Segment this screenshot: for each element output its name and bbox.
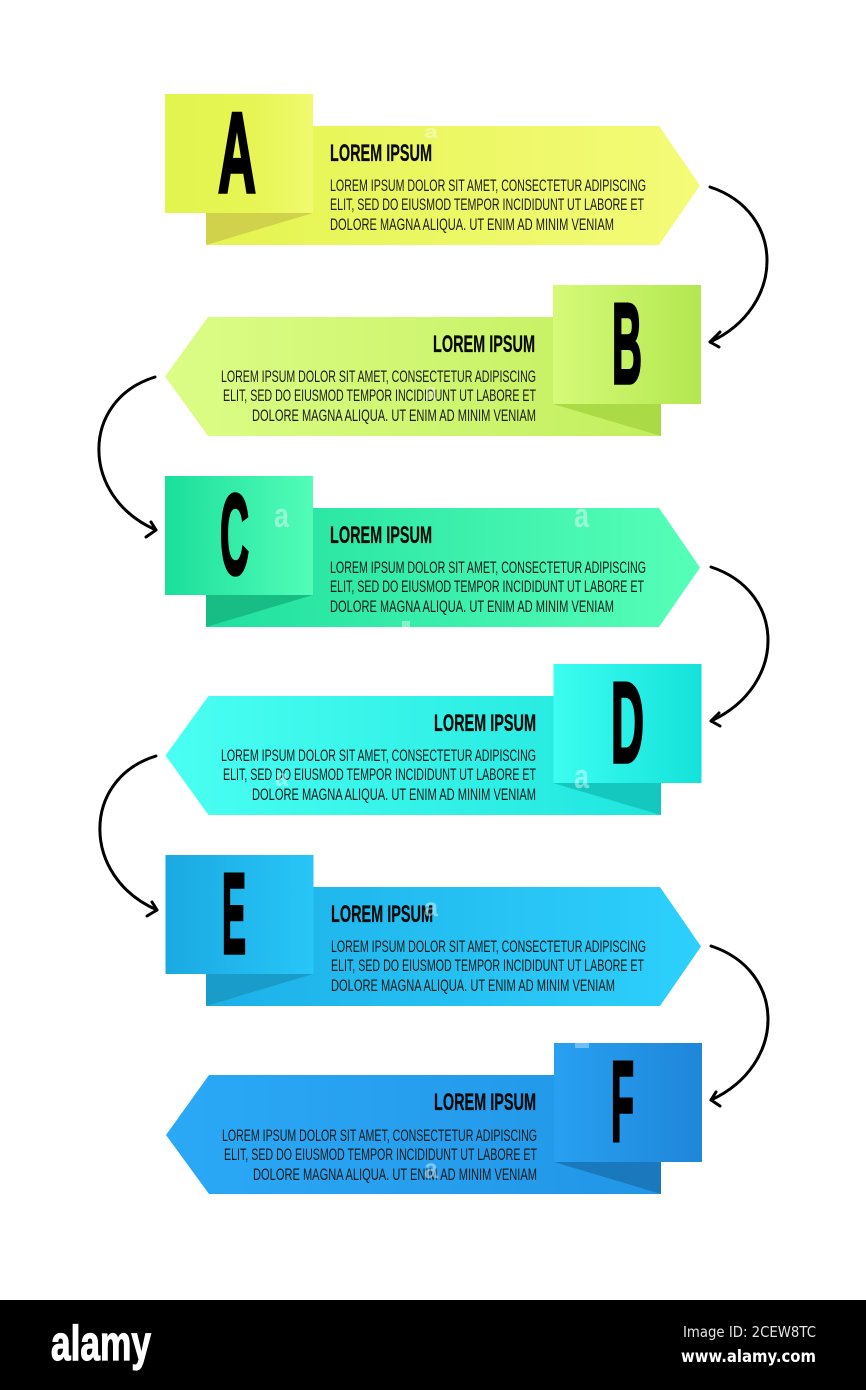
square B [553, 285, 701, 404]
arrow: C to D [711, 567, 768, 726]
footer bar [0, 1300, 866, 1390]
fold shadow C [206, 595, 313, 627]
arrow band A [206, 126, 700, 245]
body B: DOLORE MAGNA ALIQUA. UT ENIM AD MINIM VENIAM [252, 407, 536, 425]
panel: E: E [222, 851, 246, 978]
heading B: LOREM IPSUM [433, 331, 535, 358]
body B [221, 368, 536, 425]
body C [330, 559, 646, 616]
fold shadow A [206, 213, 313, 245]
body C: ELIT, SED DO EIUSMOD TEMPOR INCIDIDUNT UT LABORE ET [330, 578, 644, 596]
arrow: D to E [100, 756, 157, 916]
body A: LOREM IPSUM DOLOR SIT AMET, CONSECTETUR ADIPISCING [330, 177, 646, 195]
square A [165, 94, 313, 213]
square F [554, 1043, 702, 1162]
heading A: LOREM IPSUM [330, 140, 432, 167]
watermarks D: a [574, 758, 590, 796]
square C [165, 476, 313, 595]
arrow band D [166, 696, 661, 815]
square E [166, 855, 314, 974]
arrow band B [165, 317, 661, 436]
fold shadow E [206, 974, 313, 1006]
body E [331, 938, 646, 995]
watermark F: a [424, 1153, 438, 1184]
body D: LOREM IPSUM DOLOR SIT AMET, CONSECTETUR ADIPISCING [221, 747, 536, 765]
heading F: LOREM IPSUM [434, 1089, 536, 1116]
fold shadow B [553, 404, 661, 436]
watermark A: a [424, 122, 439, 142]
arrow: B to C [99, 377, 156, 537]
body A: DOLORE MAGNA ALIQUA. UT ENIM AD MINIM VENIAM [330, 216, 614, 234]
square D [554, 664, 702, 783]
arrow band E [206, 887, 701, 1006]
fold shadow F [554, 1162, 661, 1194]
panel: B [165, 281, 701, 436]
panel: C: C [220, 472, 249, 599]
body C: DOLORE MAGNA ALIQUA. UT ENIM AD MINIM VENIAM [330, 598, 614, 616]
heading C: LOREM IPSUM [330, 522, 432, 549]
watermarks C: a [274, 497, 290, 535]
panel: A [165, 90, 700, 245]
body F: LOREM IPSUM DOLOR SIT AMET, CONSECTETUR ADIPISCING [222, 1127, 537, 1145]
panel: D: D [611, 660, 644, 787]
body C: LOREM IPSUM DOLOR SIT AMET, CONSECTETUR ADIPISCING [330, 559, 646, 577]
heading D: LOREM IPSUM [434, 710, 536, 737]
body A [330, 177, 646, 234]
arrow: E to F [711, 946, 768, 1106]
image id: Image ID: 2CEW8TC [683, 1323, 816, 1341]
panel: B: B [612, 281, 642, 408]
arrow band F [166, 1075, 661, 1194]
body A: ELIT, SED DO EIUSMOD TEMPOR INCIDIDUNT UT LABORE ET [330, 196, 644, 214]
body F [222, 1127, 537, 1184]
body F: DOLORE MAGNA ALIQUA. UT ENIM AD MINIM VENIAM [253, 1166, 537, 1184]
body D: ELIT, SED DO EIUSMOD TEMPOR INCIDIDUNT UT LABORE ET [223, 766, 536, 784]
watermarks D: a [275, 765, 289, 792]
arrow band C [206, 508, 700, 627]
panel: E [166, 851, 701, 1006]
panel: A: A [218, 90, 256, 217]
arrow: A to B [710, 187, 767, 347]
panel: D [166, 660, 702, 815]
watermark F [424, 1043, 589, 1184]
watermark E: a [424, 892, 439, 922]
website: www.alamy.com [681, 1347, 816, 1367]
panel: C [165, 472, 700, 627]
body B: LOREM IPSUM DOLOR SIT AMET, CONSECTETUR ADIPISCING [221, 368, 536, 386]
body E: ELIT, SED DO EIUSMOD TEMPOR INCIDIDUNT UT LABORE ET [331, 957, 644, 975]
body F: ELIT, SED DO EIUSMOD TEMPOR INCIDIDUNT UT LABORE ET [224, 1146, 537, 1164]
logo: alamy [51, 1317, 151, 1371]
body D [221, 747, 536, 804]
watermarks C: a [574, 497, 590, 535]
panel: F: F [611, 1039, 634, 1166]
body B: ELIT, SED DO EIUSMOD TEMPOR INCIDIDUNT UT LABORE ET [223, 387, 536, 405]
body E: LOREM IPSUM DOLOR SIT AMET, CONSECTETUR ADIPISCING [331, 938, 646, 956]
watermarks D [275, 758, 590, 796]
fold shadow D [553, 783, 661, 815]
watermark B: a [425, 379, 438, 406]
heading E: LOREM IPSUM [331, 901, 433, 928]
body D: DOLORE MAGNA ALIQUA. UT ENIM AD MINIM VENIAM [252, 786, 536, 804]
watermarks C [274, 497, 590, 627]
body E: DOLORE MAGNA ALIQUA. UT ENIM AD MINIM VENIAM [331, 977, 615, 995]
panel: F [166, 1039, 702, 1194]
